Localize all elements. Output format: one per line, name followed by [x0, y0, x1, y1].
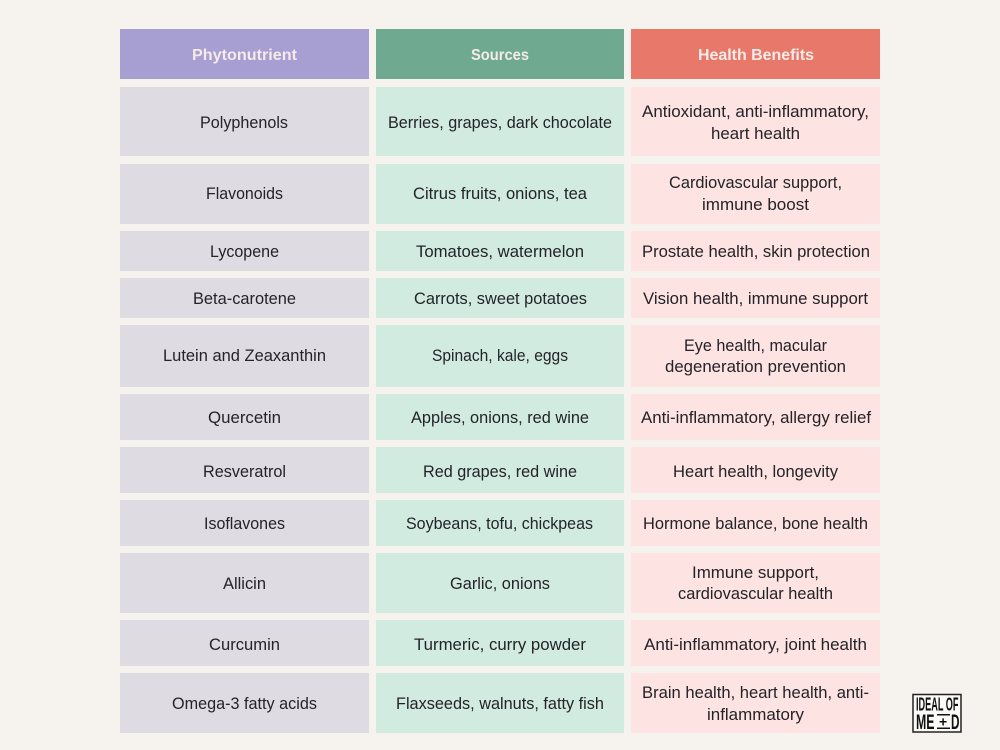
- logo: Ideal of Med: ME: [916, 711, 934, 734]
- row: Lycopene: Lycopene: [210, 243, 279, 261]
- row: Lutein and Zeaxanthin: [120, 325, 880, 387]
- row: Flavonoids: immune boost: [702, 196, 809, 214]
- row: Allicin: Garlic, onions: [450, 575, 550, 593]
- row: Omega-3 fatty acids: Flaxseeds, walnuts, fatty fish: [396, 695, 604, 713]
- logo: Ideal of Med: D: [951, 711, 960, 734]
- row: Resveratrol: [120, 447, 880, 493]
- row: Isoflavones: [120, 500, 880, 546]
- row: Curcumin: Curcumin: [209, 636, 280, 654]
- row: Allicin: Allicin: [223, 575, 266, 593]
- row: Beta-carotene: Beta-carotene: [193, 290, 296, 308]
- row: Flavonoids: Citrus fruits, onions, tea: [413, 185, 588, 203]
- row: Flavonoids: Cardiovascular support,: [669, 174, 842, 192]
- row: Omega-3 fatty acids: inflammatory: [707, 706, 805, 724]
- row: Lutein and Zeaxanthin: Eye health, macular: [684, 337, 827, 355]
- row: Quercetin: Quercetin: [208, 409, 281, 427]
- row: Lycopene: [120, 231, 880, 271]
- header: Health Benefits: Health Benefits: [698, 47, 814, 64]
- row: Allicin: [120, 553, 880, 613]
- header: Sources: Sources: [471, 47, 529, 64]
- row: Resveratrol: Resveratrol: [203, 463, 286, 481]
- row: Flavonoids: Flavonoids: [206, 185, 283, 203]
- logo: Ideal of Med: [913, 694, 961, 734]
- header: Health Benefits: [631, 29, 880, 79]
- row: Omega-3 fatty acids: Brain health, heart health, anti-: [642, 684, 869, 702]
- header: Phytonutrient: [120, 29, 369, 79]
- row: Curcumin: Turmeric, curry powder: [414, 636, 587, 654]
- row: Curcumin: [120, 620, 880, 666]
- row: Isoflavones: Isoflavones: [204, 515, 285, 533]
- header: Phytonutrient: Phytonutrient: [192, 47, 297, 64]
- row: Quercetin: [120, 394, 880, 440]
- row: Beta-carotene: Vision health, immune support: [643, 290, 868, 308]
- row: Allicin: Immune support,: [692, 564, 819, 582]
- row: Allicin: cardiovascular health: [678, 585, 833, 603]
- row: Polyphenols: [120, 87, 880, 156]
- row: Omega-3 fatty acids: Omega-3 fatty acids: [172, 695, 317, 713]
- row: Beta-carotene: Carrots, sweet potatoes: [414, 290, 587, 308]
- row: Lycopene: Prostate health, skin protection: [642, 243, 870, 261]
- row: Lycopene: Tomatoes, watermelon: [416, 243, 584, 261]
- row: Polyphenols: Antioxidant, anti-inflammatory,: [642, 103, 869, 121]
- table header row: [120, 29, 880, 79]
- row: Polyphenols: Berries, grapes, dark chocolate: [388, 114, 612, 132]
- row: Curcumin: Anti-inflammatory, joint health: [644, 636, 867, 654]
- row: Quercetin: Apples, onions, red wine: [411, 409, 589, 427]
- row: Isoflavones: Hormone balance, bone health: [643, 515, 868, 533]
- row: Lutein and Zeaxanthin: Spinach, kale, eggs: [432, 347, 568, 365]
- row: Isoflavones: Soybeans, tofu, chickpeas: [406, 515, 593, 533]
- row: Beta-carotene: [120, 278, 880, 318]
- row: Omega-3 fatty acids: [120, 673, 880, 733]
- row: Flavonoids: [120, 164, 880, 224]
- header: Sources: [376, 29, 624, 79]
- row: Resveratrol: Red grapes, red wine: [423, 463, 577, 481]
- logo: Ideal of Med: +: [939, 714, 947, 730]
- logo: Ideal of Med: IDEAL OF: [916, 694, 959, 714]
- row: Resveratrol: Heart health, longevity: [673, 463, 839, 481]
- row: Lutein and Zeaxanthin: degeneration prevention: [665, 358, 846, 376]
- row: Lutein and Zeaxanthin: Lutein and Zeaxanthin: [163, 347, 326, 365]
- row: Polyphenols: heart health: [711, 125, 800, 143]
- row: Polyphenols: Polyphenols: [200, 114, 288, 132]
- row: Quercetin: Anti-inflammatory, allergy relief: [641, 409, 871, 427]
